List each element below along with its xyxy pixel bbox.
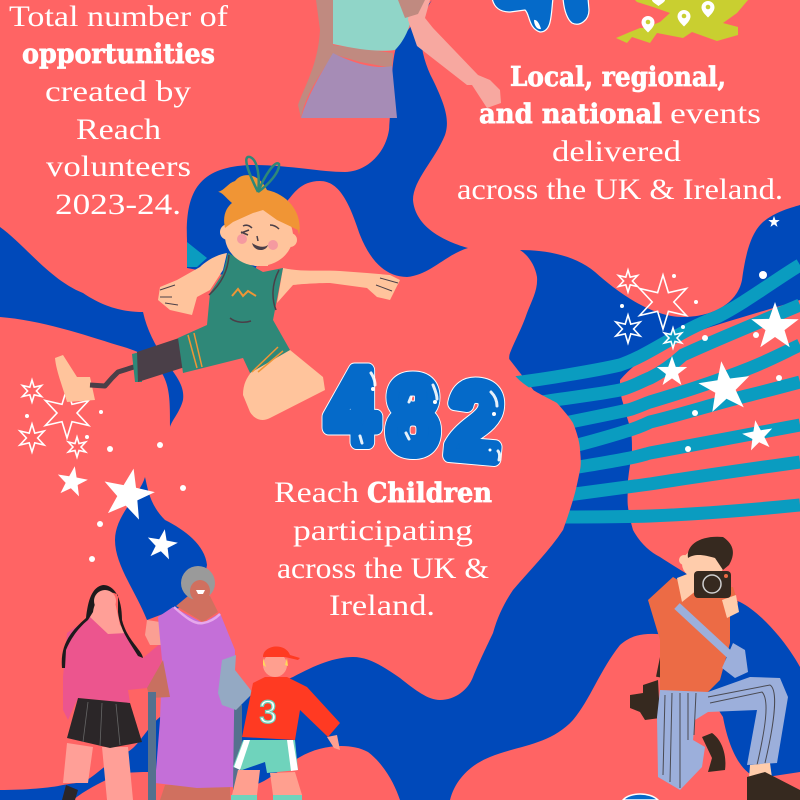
text block: opportunities: Total number of: [9, 0, 228, 33]
map: UK with pins: [616, 0, 748, 43]
icon: number blob top: [492, 0, 589, 32]
text block: children: across the UK &: [277, 552, 489, 585]
star cluster: right: [616, 216, 799, 452]
star cluster: left: [20, 380, 186, 562]
figure: woman in pink sweater: [62, 585, 166, 800]
text block: events: [457, 62, 783, 206]
big number 482: 8: [388, 357, 438, 474]
big number 482: [327, 348, 506, 481]
text block: opportunities: 2023-24.: [55, 188, 181, 221]
figure: older woman with cane: [147, 566, 253, 800]
red area: lower centre hill: [450, 634, 800, 800]
text block: children: Ireland.: [329, 589, 435, 622]
text block: events: delivered: [552, 135, 681, 168]
text block: opportunities: volunteers: [46, 150, 191, 183]
big number 482: 2: [444, 360, 506, 481]
text block: children: [274, 476, 492, 622]
big number 482: 8: [388, 357, 438, 474]
text block: opportunities: opportunities: [22, 39, 215, 70]
blue wave: flame behind people: [115, 477, 207, 620]
big number 482: 2: [444, 360, 506, 481]
big number 482: 4: [327, 348, 377, 465]
text block: events: across the UK & Ireland.: [457, 173, 783, 206]
figure: photographer kneeling: [630, 537, 800, 800]
blue wave: left: [0, 227, 183, 427]
jersey number: 3: [259, 694, 277, 730]
icon: number blob at bottom edge: [623, 794, 658, 800]
text block: opportunities: Reach: [76, 113, 161, 146]
figure: boy in red sweater: [231, 647, 340, 800]
red centre blob edge over stripes: [480, 353, 581, 530]
red area: lower left hill: [73, 746, 400, 800]
teal ribbon stripes: [505, 265, 800, 517]
text block: events: and national: [479, 99, 662, 130]
figure: woman torso at top: [298, 0, 501, 118]
text block: opportunities: created by: [45, 75, 191, 108]
big number 482: 4: [327, 348, 377, 465]
blue wave: main lower and right area: [0, 205, 800, 800]
text block: children: participating: [293, 514, 473, 547]
red area: right side: [620, 300, 800, 667]
text block: children: Reach: [274, 476, 359, 509]
text block: events: Local, regional,: [510, 62, 726, 93]
figure: jumping child with prosthetic leg: [55, 157, 400, 420]
text block: children: Children: [367, 478, 492, 509]
teal corner behind child: [187, 242, 207, 267]
text block: events: events: [670, 97, 761, 130]
text block: opportunities: [9, 0, 228, 221]
blue wave: upper centre: [187, 0, 468, 280]
